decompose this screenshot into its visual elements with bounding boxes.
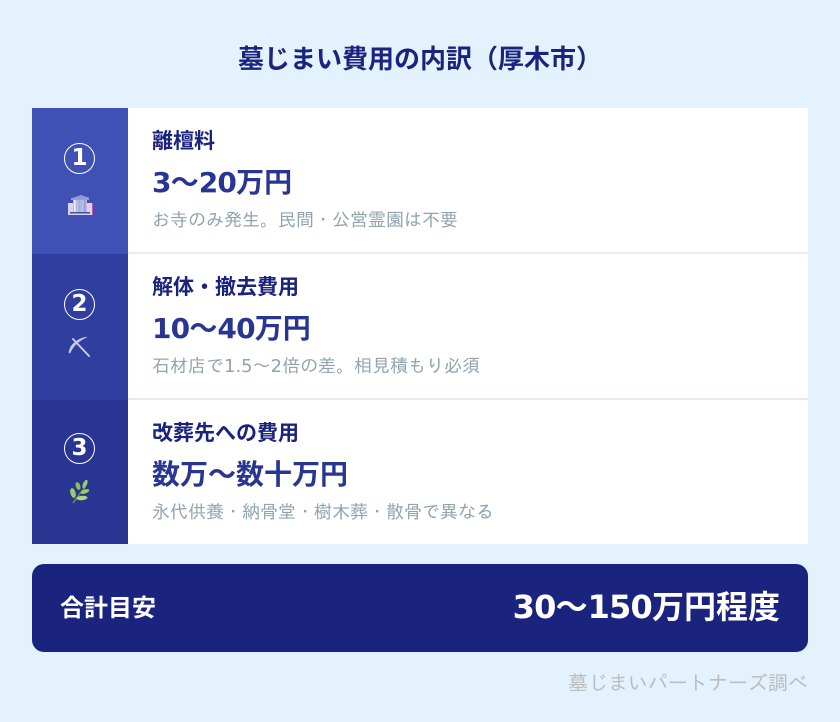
source credit: 墓じまいパートナーズ調べ	[568, 673, 808, 693]
item 3 amount: 数万〜数十万円	[152, 458, 348, 491]
item 2 heading: 解体・撤去費用	[152, 271, 299, 301]
panel: item 2	[32, 254, 808, 400]
item 3 number	[64, 433, 95, 464]
item 1 amount: 3〜20万円	[152, 166, 292, 199]
item 2 note: 石材店で1.5〜2倍の差。相見積もり必須	[152, 356, 480, 377]
panel: item 3	[32, 400, 808, 544]
item 1 number	[64, 143, 95, 174]
panel: total	[32, 564, 808, 652]
panel: item 1	[32, 108, 808, 254]
item 1 body	[128, 108, 808, 252]
item 3 number: 3	[71, 435, 88, 461]
item 2 amount: 10〜40万円	[152, 312, 311, 345]
item 2 number: 2	[71, 291, 88, 317]
item 1 heading: 離檀料	[152, 125, 215, 155]
item 1 number column	[32, 108, 128, 254]
item 3 heading: 改葬先への費用	[152, 417, 299, 447]
item 1 note: お寺のみ発生。民間・公営霊園は不要	[152, 210, 458, 231]
item 2 number	[64, 289, 95, 320]
icon: temple	[68, 195, 93, 215]
title: 墓じまい費用の内訳（厚木市）	[238, 39, 602, 76]
icon: herb	[70, 480, 90, 504]
item 3 number column	[32, 400, 128, 544]
icon: pickaxe	[68, 336, 90, 357]
item 1 number: 1	[71, 145, 88, 171]
item 3 body	[128, 400, 808, 544]
item 3 note: 永代供養・納骨堂・樹木葬・散骨で異なる	[152, 502, 494, 523]
item 2 body	[128, 254, 808, 398]
item 2 number column	[32, 254, 128, 400]
total label: 合計目安	[60, 588, 156, 623]
total amount: 30〜150万円程度	[513, 588, 780, 626]
